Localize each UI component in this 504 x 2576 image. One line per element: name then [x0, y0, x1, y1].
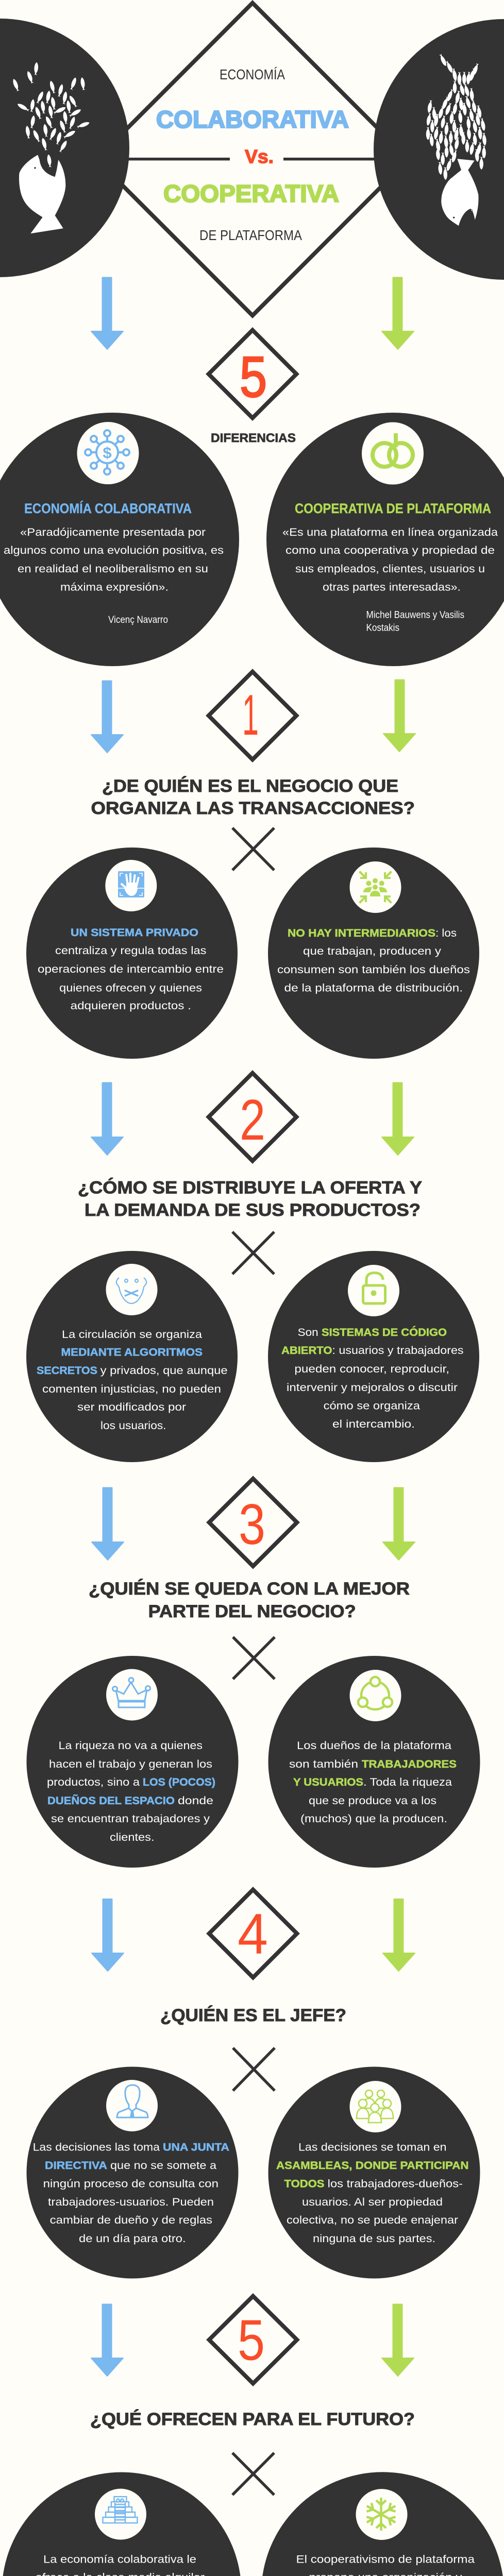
text block: Los dueños de la plataforma [297, 1740, 451, 1752]
icon: crown [106, 1669, 158, 1721]
number diamond 1: 1 [242, 683, 259, 747]
text block: que no se somete a [110, 2160, 216, 2172]
icon: money network: $ [103, 444, 112, 462]
heading 3: ¿QUIÉN SE QUEDA CON LA MEJOR [89, 1578, 410, 1599]
text block [33, 2141, 229, 2245]
arrow: blue intro [91, 277, 123, 349]
text block: ser modificados por [77, 1401, 186, 1413]
text block: . Toda la riqueza [363, 1776, 452, 1788]
arrow: blue 4 [92, 1899, 124, 1971]
text block [289, 1740, 457, 1825]
number diamond 4 [209, 1890, 297, 1977]
panel heading: ECONOMÍA COLABORATIVA [24, 500, 192, 516]
panel: 3 left circle [27, 1656, 238, 1868]
X separator 4 [233, 2048, 275, 2091]
icon: people with arrows [349, 861, 401, 913]
authors [366, 610, 464, 634]
arrow: green 3 [383, 1487, 415, 1560]
text block: se encuentran trabajadores y [51, 1813, 210, 1825]
divider lines beside Vs. [126, 158, 376, 161]
number diamond 2 [209, 1073, 296, 1161]
quote: «Paradójicamente presentada por [20, 527, 206, 538]
quote: máxima expresión». [60, 581, 169, 594]
icon: executive [106, 2080, 158, 2131]
panel: 4 right circle [268, 2067, 480, 2278]
heading: diferencias: DIFERENCIAS [211, 431, 296, 445]
text block: ninguna de sus partes. [313, 2233, 435, 2245]
panel: right half circle with fish school forming a big fish [374, 19, 504, 280]
text block: pueden conocer, reproducir, [294, 1363, 449, 1375]
panel: 5 left circle [2, 2472, 241, 2576]
number diamond: 5 differences: 5 [240, 345, 267, 409]
title diamond [96, 3, 409, 315]
panel: 1 left circle [26, 848, 238, 1059]
text block: Las decisiones las toma [33, 2141, 160, 2154]
arrow: blue 1 [91, 681, 123, 753]
text block: ABIERTO [281, 1345, 332, 1357]
panel: left half circle with big fish eating small fish [0, 19, 129, 277]
quote: como una cooperativa y propiedad de [285, 545, 495, 556]
heading 4: ¿QUIÉN ES EL JEFE? [160, 2005, 346, 2025]
text block: y privados, que aunque [100, 1365, 228, 1377]
number diamond 5 [209, 2296, 297, 2383]
text block [276, 2141, 469, 2245]
title text block [156, 66, 349, 243]
text block: (muchos) que la producen. [300, 1813, 447, 1825]
text block: usuarios. Al ser propiedad [302, 2196, 443, 2208]
text block: UN SISTEMA PRIVADO [71, 927, 198, 939]
text block: son también [289, 1758, 358, 1770]
text block: DIRECTIVA [45, 2160, 107, 2172]
text block: adquieren productos . [71, 1000, 191, 1012]
number diamond 5: 5 [238, 2309, 265, 2372]
panel: 1 right circle [268, 848, 479, 1059]
heading 2 [78, 1177, 422, 1220]
quote [282, 527, 498, 594]
text block [277, 927, 470, 994]
text block: intervenir y mejoralos o discutir [287, 1382, 458, 1394]
heading 2: LA DEMANDA DE SUS PRODUCTOS? [85, 1200, 421, 1220]
title text block: Vs. [245, 146, 274, 167]
panel: 3 right circle [268, 1656, 480, 1868]
text block: SECRETOS [37, 1365, 97, 1377]
text block [33, 2554, 207, 2576]
text block [37, 1329, 228, 1432]
arrow: blue 3 [92, 1487, 124, 1560]
text block: de un día para otro. [79, 2233, 186, 2245]
illustration: scattered fish school [12, 62, 90, 233]
text block: ASAMBLEAS, DONDE PARTICIPAN [276, 2160, 469, 2172]
quote: «Es una plataforma en línea organizada [282, 527, 498, 538]
icon: snowflake [356, 2489, 407, 2540]
text block: quienes ofrecen y quienes [59, 982, 202, 994]
text block: el intercambio. [332, 1418, 415, 1430]
text block: Son [298, 1327, 318, 1338]
text block: operaciones de intercambio entre [38, 963, 224, 975]
arrow: green 1 [383, 680, 415, 752]
arrow: green intro [382, 277, 414, 349]
text block: clientes. [110, 1832, 155, 1843]
text block [290, 2554, 481, 2576]
authors: Kostakis [366, 622, 399, 634]
X separator 3 [233, 1637, 275, 1679]
text block: SISTEMAS DE CÓDIGO [322, 1326, 447, 1338]
text block: los usuarios. [100, 1420, 166, 1432]
icon: group of people [349, 2081, 401, 2132]
icon: hand scanner [105, 860, 157, 911]
quote: algunos como una evolución positiva, es [4, 545, 224, 556]
text block [38, 927, 224, 1012]
heading 1: ORGANIZA LAS TRANSACCIONES? [91, 799, 415, 818]
illustration: organized fish school [426, 54, 487, 226]
title text block: ECONOMÍA [220, 66, 285, 82]
text block: consumen son también los dueños [277, 964, 470, 976]
arrow: green 4 [383, 1899, 415, 1971]
text block: Y USUARIOS [293, 1776, 363, 1788]
panel: 2 left circle [26, 1251, 238, 1462]
icon: pyramid [95, 2488, 146, 2540]
title text block: DE PLATAFORMA [199, 227, 302, 243]
text block: NO HAY INTERMEDIARIOS [288, 927, 435, 939]
text block: La economía colaborativa le [43, 2554, 196, 2566]
arrow: green 5 [382, 2304, 414, 2376]
number diamond 4: 4 [238, 1902, 268, 1966]
number diamond 3 [209, 1479, 297, 1566]
text block: comenten injusticias, no pueden [42, 1383, 221, 1395]
text block: DUEÑOS DEL ESPACIO [47, 1795, 175, 1807]
text block: El cooperativismo de plataforma [296, 2554, 475, 2566]
quote: otras partes interesadas». [323, 581, 461, 594]
heading 3: PARTE DEL NEGOCIO? [148, 1602, 356, 1621]
text block: Las decisiones se toman en [298, 2141, 446, 2154]
title text block: COOPERATIVA [163, 180, 339, 207]
number diamond 1 [209, 672, 296, 759]
icon: interlocked rings [362, 422, 424, 484]
text block: : los [435, 927, 457, 939]
authors: Michel Bauwens y Vasilis [366, 610, 464, 621]
text block: hacen el trabajo y generan los [49, 1758, 212, 1770]
panel: 2 right circle [268, 1251, 479, 1462]
panel: 5 right circle [261, 2472, 504, 2576]
number diamond 3: 3 [239, 1493, 265, 1556]
title text block: COLABORATIVA [156, 106, 349, 133]
text block: UNA JUNTA [163, 2141, 229, 2154]
text block: LOS (POCOS) [143, 1776, 215, 1788]
arrow: green 2 [382, 1082, 414, 1155]
text block: trabajadores-usuarios. Pueden [48, 2196, 214, 2208]
text block: los trabajadores-dueños- [328, 2178, 463, 2190]
text block: La riqueza no va a quienes [59, 1740, 203, 1752]
text block: TODOS [284, 2178, 325, 2190]
panel: economía colaborativa [0, 413, 239, 666]
arrow: blue 5 [91, 2304, 123, 2376]
icon: cycle of three nodes [349, 1670, 401, 1721]
text block: productos, sino a [47, 1776, 140, 1788]
text block: cambiar de dueño y de reglas [50, 2214, 212, 2226]
text block: que se produce va a los [309, 1795, 436, 1807]
arrow: blue 2 [91, 1082, 123, 1155]
X separator 2 [232, 1232, 274, 1274]
text block [47, 1740, 215, 1843]
quote [4, 527, 224, 594]
text block: MEDIANTE ALGORITMOS [61, 1347, 203, 1358]
X separator 1 [232, 828, 274, 870]
panel: cooperativa de plataforma [266, 413, 504, 666]
text block: ningún proceso de consulta con [43, 2178, 219, 2190]
heading 5: ¿QUÉ OFRECEN PARA EL FUTURO? [90, 2409, 415, 2429]
text block: La circulación se organiza [62, 1329, 202, 1341]
icon: money network [77, 422, 139, 484]
number diamond 2: 2 [240, 1088, 265, 1152]
icon: open padlock [348, 1265, 399, 1316]
heading 1: ¿DE QUIÉN ES EL NEGOCIO QUE [102, 775, 398, 796]
text block [281, 1326, 464, 1430]
heading 1 [91, 775, 415, 818]
number diamond: 5 differences [209, 330, 296, 418]
text block: TRABAJADORES [362, 1758, 457, 1770]
text block: que trabajan, producen y [303, 945, 442, 957]
text block: cómo se organiza [324, 1400, 420, 1412]
text block: colectiva, no se puede enajenar [287, 2214, 458, 2226]
panel: 4 left circle [27, 2067, 238, 2278]
text block: centraliza y regula todas las [55, 945, 206, 957]
X separator 5 [232, 2453, 274, 2495]
quote: sus empleados, clientes, usuarios u [295, 563, 485, 575]
heading 2: ¿CÓMO SE DISTRIBUYE LA OFERTA Y [78, 1177, 422, 1197]
heading 3 [89, 1578, 410, 1621]
text block: : usuarios y trabajadores [332, 1345, 464, 1357]
quote: en realidad el neoliberalismo en su [18, 563, 208, 575]
text block: de la plataforma de distribución. [284, 982, 463, 994]
author: Vicenç Navarro [108, 615, 168, 625]
text block: donde [178, 1795, 213, 1807]
icon: gagged face [106, 1264, 158, 1315]
